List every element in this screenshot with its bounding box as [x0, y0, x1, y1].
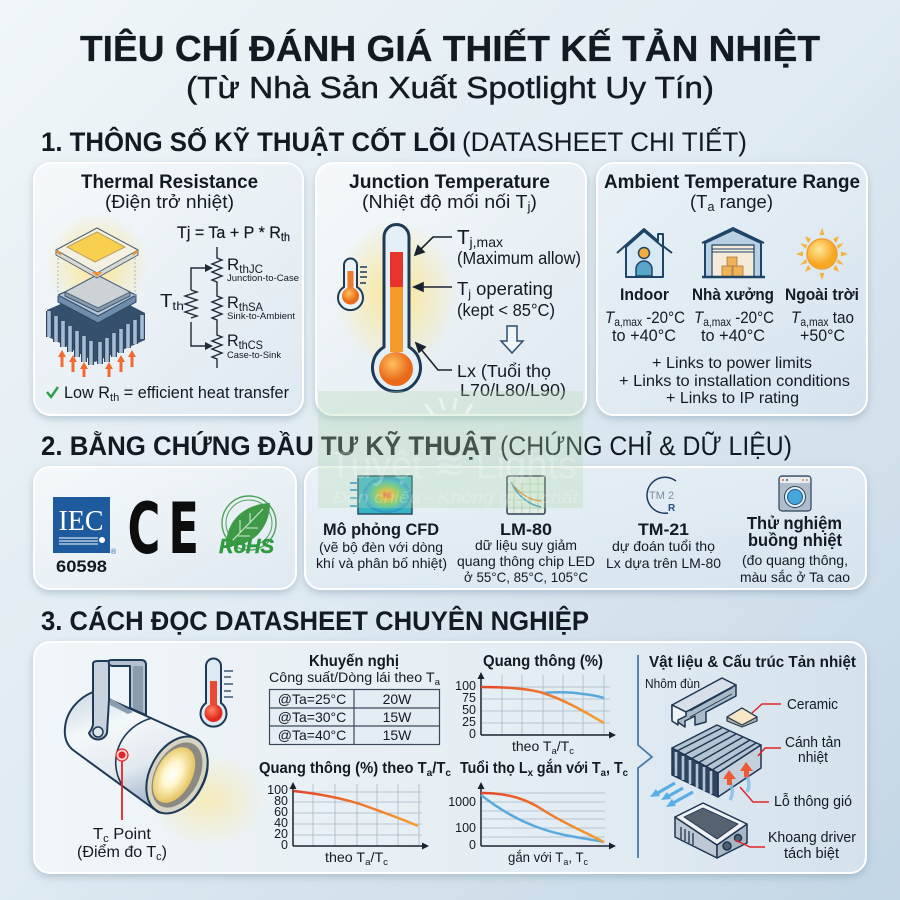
- chart: lifetime Lx: c: [584, 857, 588, 868]
- text: thermal chamber: buồng nhiệt: [748, 530, 842, 550]
- icon: thermal chamber: [779, 476, 811, 511]
- thermal resistor network diagram: thCS: [239, 340, 263, 352]
- label: Tj operating: T: [457, 279, 468, 299]
- text: thermal chamber: Thử nghiệm: [747, 513, 842, 533]
- watermark: Tuyệt ≋ Lights: [329, 445, 577, 487]
- panel heading: junction temperature: j: [526, 200, 530, 214]
- text: TM-21: Lx dựa trên LM-80: [606, 555, 721, 571]
- label: Tj operating: j: [467, 287, 471, 301]
- panel heading: junction temperature: (Nhiệt độ mối nối T: [362, 191, 518, 212]
- heading: recommendation: [269, 653, 441, 687]
- thermal resistor network diagram: R: [227, 331, 239, 350]
- column: outdoor: T: [791, 308, 802, 327]
- label: Tc point: c: [156, 851, 162, 863]
- note: low Rth: [47, 384, 289, 404]
- column: workshop: a,max: [703, 317, 731, 329]
- thermal resistor network diagram: R: [227, 255, 239, 274]
- table: power versus ambient temperature: @Ta=40°C: [278, 727, 346, 743]
- panel: technical evidence: [305, 467, 866, 589]
- icon: small thermometer: [338, 259, 367, 310]
- logo: IEC 60598: 60598: [56, 557, 107, 576]
- label: Tc point: T: [93, 826, 103, 843]
- marker: Tc point: [116, 749, 128, 820]
- subtitle: (Từ Nhà Sản Xuất Spotlight Uy Tín): [186, 70, 714, 105]
- chart: lifetime Lx: gắn với T: [533, 759, 601, 777]
- column: workshop: T: [694, 308, 705, 327]
- column: indoor: Indoor: [620, 285, 669, 304]
- chart: lifetime Lx: c: [623, 767, 628, 779]
- icon: TM-21: R: [668, 503, 676, 514]
- logo: RoHS: [219, 496, 276, 558]
- table: power versus ambient temperature: 15W: [383, 709, 412, 725]
- icon: CFD simulation: [350, 476, 412, 514]
- panel: certifications: [34, 467, 296, 589]
- icon: LED chip on heatsink: [45, 213, 149, 377]
- icon: spotlight: [65, 660, 266, 848]
- text: thermal chamber: màu sắc ở Ta cao: [740, 569, 850, 585]
- note: low Rth: = efficient heat transfer: [119, 384, 289, 402]
- chart: lifetime Lx: gắn với T: [508, 849, 567, 865]
- icon: LM-80 chart: [507, 476, 545, 514]
- label: Tj max: [457, 227, 581, 268]
- thermal resistor network diagram: thJC: [239, 264, 263, 276]
- chart: lifetime Lx: Tuổi thọ L: [460, 760, 534, 777]
- column: workshop: [692, 285, 774, 345]
- chart: luminous flux versus Ta/Tc: /T: [432, 760, 446, 777]
- text: TM-21: [606, 520, 721, 571]
- column: indoor: -20°C: [642, 308, 685, 327]
- chart: luminous flux versus Ta/Tc: /T: [370, 849, 384, 865]
- heading: recommendation: Khuyến nghị: [309, 653, 399, 670]
- callout: driver compartment: [735, 829, 856, 862]
- heading: section 1: [41, 127, 747, 157]
- chart: luminous flux percent: 50: [462, 703, 476, 717]
- note: low Rth: th: [110, 392, 119, 404]
- thermal resistor network diagram: T: [160, 291, 171, 311]
- label: extruded aluminium: Nhôm đùn: [645, 677, 700, 691]
- chart: luminous flux versus Ta/Tc: 20: [274, 827, 288, 841]
- label: Tc point: c: [103, 833, 109, 845]
- text: thermal chamber: [740, 513, 850, 585]
- heading: section 2: 2. BẰNG CHỨNG ĐẦU TƯ KỸ THUẬT: [41, 431, 496, 461]
- panel heading: junction temperature: ): [530, 191, 537, 212]
- label: Tj operating: (kept < 85°C): [457, 300, 555, 320]
- arrow: Lx: [416, 343, 452, 370]
- icon: TM-21: TM 2: [649, 490, 674, 502]
- table: power versus ambient temperature: 15W: [383, 727, 412, 743]
- text: LM-80: ở 55°C, 85°C, 105°C: [464, 569, 588, 585]
- panel heading: ambient temperature: (T: [690, 191, 707, 212]
- text: thermal chamber: (đo quang thông,: [742, 552, 848, 568]
- chart: luminous flux percent: a: [551, 746, 557, 757]
- text: LM-80: quang thông chip LED: [457, 553, 595, 569]
- text block: links: [619, 355, 850, 407]
- label: Tc point: ): [162, 844, 167, 861]
- text: TM-21: dự đoán tuổi thọ: [612, 538, 715, 554]
- table: power versus ambient temperature: @Ta=25°C: [278, 691, 346, 707]
- panel heading: thermal resistance: (Điện trở nhiệt): [105, 191, 234, 212]
- column: indoor: T: [605, 308, 616, 327]
- chart: luminous flux versus Ta/Tc: [259, 760, 451, 868]
- panel heading: ambient temperature: range): [714, 191, 773, 212]
- panel: reading a datasheet: [34, 642, 866, 873]
- illustration: extruded aluminium rail: [672, 678, 736, 727]
- panel heading: junction temperature: [349, 172, 550, 214]
- icon: TM-21: [647, 477, 676, 514]
- chart: luminous flux versus Ta/Tc: Quang thông (%) theo T: [259, 760, 435, 777]
- icon: large thermometer: [334, 220, 458, 391]
- label: Tj max: j,max: [469, 235, 503, 250]
- column: outdoor: a,max: [800, 317, 829, 329]
- heading: section 2: [41, 431, 792, 461]
- thermal resistor network diagram: thSA: [239, 302, 263, 314]
- icon: hollow down arrow: [501, 326, 523, 353]
- chart: lifetime Lx: a: [563, 857, 569, 868]
- chart: lifetime Lx: [448, 759, 628, 868]
- icon: warehouse: [702, 228, 765, 277]
- panel: junction temperature: [316, 163, 586, 415]
- label: Lx lifetime: L70/L80/L90): [460, 380, 566, 400]
- icon: house: [617, 229, 672, 277]
- text: CFD: khí và phân bố nhiệt): [316, 555, 447, 571]
- chart: luminous flux versus Ta/Tc: 0: [281, 838, 288, 852]
- heading: section 1: 1. THÔNG SỐ KỸ THUẬT CỐT LÕI: [41, 127, 456, 157]
- heading: section 3: 3. CÁCH ĐỌC DATASHEET CHUYÊN NGHIỆP: [41, 606, 589, 636]
- panel heading: junction temperature: Junction Temperature: [349, 172, 550, 193]
- arrow: Tj operating: [414, 283, 452, 291]
- panel: thermal resistance: [34, 163, 303, 415]
- chart: luminous flux versus Ta/Tc: c: [445, 767, 451, 779]
- chart: luminous flux percent: c: [569, 746, 574, 757]
- callout: vents: Lỗ thông gió: [774, 793, 852, 810]
- text: CFD: (vẽ bộ đèn với dòng: [319, 539, 443, 555]
- watermark: [318, 391, 583, 508]
- formula: Tj = Ta + P * R: [177, 223, 287, 242]
- heading: materials and structure: Vật liệu & Cấu trúc Tản nhiệt: [649, 654, 857, 671]
- chart: luminous flux percent: 0: [469, 727, 476, 741]
- callout: ceramic: [752, 696, 838, 713]
- logo: IEC 60598: [53, 497, 117, 576]
- watermark: Đèn chiếu - Không gian chất: [333, 488, 579, 507]
- callout: ceramic: Ceramic: [787, 696, 838, 713]
- column: indoor: a,max: [614, 317, 642, 329]
- chart: luminous flux percent: 25: [462, 715, 476, 729]
- chart: luminous flux versus Ta/Tc: 80: [274, 794, 288, 808]
- table: power versus ambient temperature: @Ta=30°C: [278, 709, 346, 725]
- thermal resistor network diagram: [160, 247, 299, 368]
- label: Tc point: Point: [109, 826, 152, 843]
- column: workshop: Nhà xưởng: [692, 285, 774, 304]
- label: Tj max: (Maximum allow): [457, 248, 581, 268]
- title: TIÊU CHÍ ĐÁNH GIÁ THIẾT KẾ TẢN NHIỆT: [80, 27, 820, 69]
- column: indoor: [605, 285, 685, 345]
- heading: recommendation: a: [435, 677, 441, 687]
- heading: section 1: (DATASHEET CHI TIẾT): [462, 127, 747, 157]
- heading: section 2: (CHỨNG CHỈ & DỮ LIỆU): [500, 431, 792, 461]
- panel heading: thermal resistance: Thermal Resistance: [81, 172, 258, 193]
- table: power versus ambient temperature: [269, 689, 440, 745]
- label: Tj max: T: [457, 227, 469, 249]
- text: CFD: Mô phỏng CFD: [323, 520, 439, 539]
- callout: fins: Cánh tản: [785, 734, 841, 751]
- logo: CE mark: C: [127, 487, 160, 570]
- callout: driver compartment: tách biệt: [784, 845, 840, 862]
- label: Tc point: [77, 826, 167, 863]
- chart: lifetime Lx: 0: [469, 838, 476, 852]
- logo: IEC 60598: IEC: [58, 505, 104, 537]
- text: LM-80: LM-80: [500, 520, 552, 539]
- text block: links: + Links to installation conditions: [619, 373, 850, 390]
- formula: th: [281, 232, 290, 244]
- chart: luminous flux versus Ta/Tc: c: [383, 857, 388, 868]
- label: Lx lifetime: [457, 361, 566, 400]
- logo: IEC 60598: ®: [111, 548, 117, 556]
- heading: recommendation: Công suất/Dòng lái theo T: [269, 670, 426, 685]
- chart: luminous flux percent: 100: [455, 679, 476, 693]
- note: low Rth: Low R: [64, 384, 111, 402]
- label: Lx lifetime: Lx (Tuổi thọ: [457, 361, 551, 381]
- column: workshop: -20°C: [731, 308, 774, 327]
- panel: ambient temperature range: [597, 163, 867, 415]
- text: CFD: [316, 520, 447, 571]
- thermal resistor network diagram: th: [172, 299, 184, 313]
- chart: lifetime Lx: a: [601, 767, 606, 779]
- chart: lifetime Lx: 1000: [448, 795, 476, 809]
- chart: luminous flux versus Ta/Tc: a: [365, 857, 371, 868]
- column: outdoor: Ngoài trời: [785, 285, 859, 304]
- panel heading: ambient temperature: Ambient Temperature Range: [604, 172, 860, 193]
- table: power versus ambient temperature: 20W: [383, 691, 412, 707]
- callout: driver compartment: Khoang driver: [768, 829, 856, 846]
- logo: RoHS: RoHS: [219, 536, 275, 558]
- illustration: finned heatsink: [672, 725, 761, 800]
- column: outdoor: [785, 285, 859, 345]
- chart: luminous flux percent: 75: [462, 691, 476, 705]
- chart: luminous flux versus Ta/Tc: theo T: [325, 849, 364, 865]
- callout: fins: nhiệt: [798, 749, 829, 766]
- text: TM-21: TM-21: [638, 520, 689, 539]
- arrow: Tj max: [415, 237, 452, 255]
- chart: luminous flux percent: Quang thông (%): [483, 653, 603, 670]
- text block: links: + Links to power limits: [652, 355, 812, 372]
- chart: luminous flux percent: theo T: [512, 738, 551, 754]
- label: Tj operating: [457, 279, 555, 320]
- label: Tc point: (Điểm đo T: [77, 844, 156, 861]
- divider with chevron: [638, 655, 652, 858]
- label: Tj operating: operating: [471, 279, 553, 299]
- chart: luminous flux versus Ta/Tc: 40: [274, 816, 288, 830]
- column: outdoor: +50°C: [800, 327, 845, 345]
- icon: sun: [796, 228, 848, 280]
- chart: luminous flux versus Ta/Tc: a: [427, 767, 432, 779]
- text block: links: + Links to IP rating: [666, 390, 799, 407]
- illustration: ceramic plate: [727, 708, 757, 727]
- panel heading: ambient temperature: a: [707, 200, 714, 214]
- thermal resistor network diagram: Sink-to-Ambient: [227, 311, 295, 322]
- thermal resistor network diagram: R: [227, 293, 239, 312]
- panel heading: thermal resistance: [81, 172, 258, 212]
- column: outdoor: tao: [829, 308, 854, 327]
- chart: luminous flux versus Ta/Tc: 60: [274, 805, 288, 819]
- logo: CE mark: E: [168, 487, 199, 570]
- callout: fins: [758, 734, 841, 766]
- icon: red thermometer: [200, 658, 233, 727]
- text: LM-80: dữ liệu suy giảm: [475, 537, 577, 553]
- chart: lifetime Lx: , T: [606, 760, 623, 777]
- column: workshop: to +40°C: [701, 327, 765, 345]
- chart: lifetime Lx: x: [528, 767, 533, 779]
- illustration: driver box: [675, 803, 747, 858]
- chart: luminous flux versus Ta/Tc: 100: [267, 783, 288, 797]
- thermal resistor network diagram: Case-to-Sink: [227, 350, 281, 361]
- callout: vents: [740, 787, 852, 810]
- text: LM-80: [457, 520, 595, 585]
- chart: luminous flux percent: /T: [557, 738, 570, 754]
- column: indoor: to +40°C: [612, 327, 676, 345]
- chart: luminous flux percent: [455, 653, 616, 757]
- panel heading: ambient temperature: [604, 172, 860, 214]
- thermal resistor network diagram: Junction-to-Case: [227, 273, 299, 284]
- chart: lifetime Lx: 100: [455, 821, 476, 835]
- chart: lifetime Lx: , T: [568, 849, 584, 865]
- arrows: exhaust air: [650, 783, 693, 807]
